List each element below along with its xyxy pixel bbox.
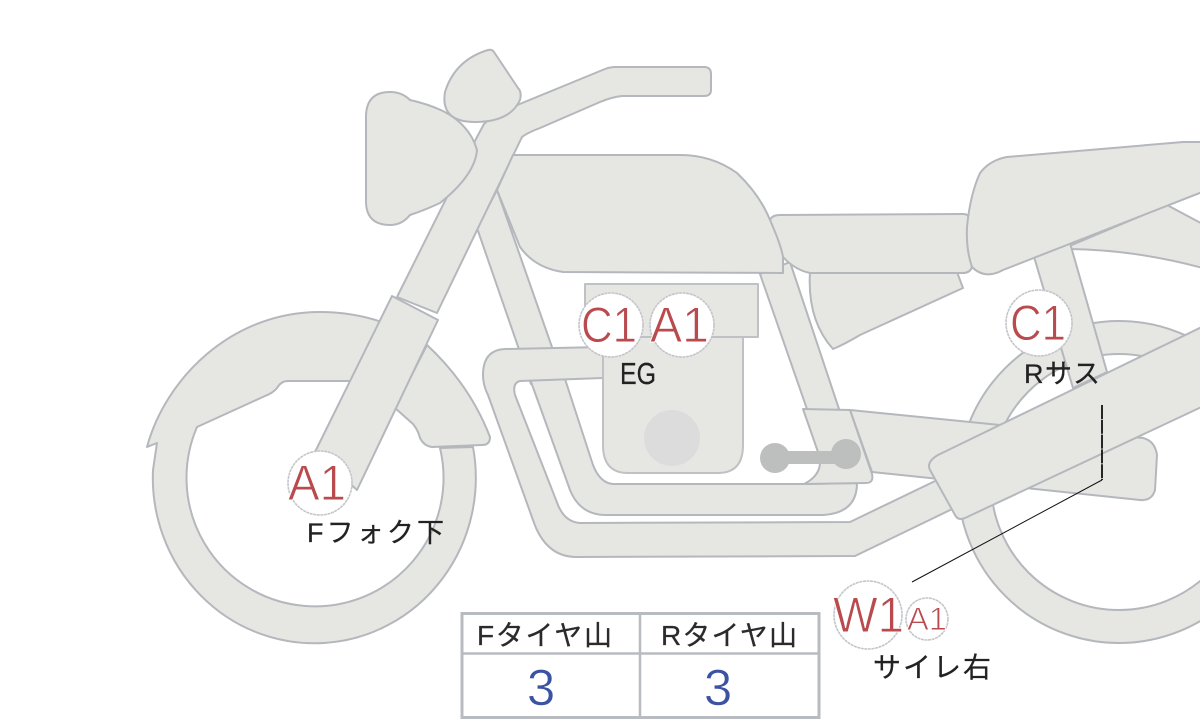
value: front tire tread: 3	[527, 659, 555, 716]
lower frame loop	[530, 379, 857, 515]
muffler	[929, 323, 1200, 519]
label: rear suspension: Rサス	[1024, 359, 1100, 389]
fork and handlebar	[397, 67, 711, 313]
rear shock	[1032, 236, 1107, 388]
marker: rear suspension: C1	[1010, 295, 1066, 351]
marker: muffler W1: W1	[833, 587, 904, 643]
engine crankcase	[603, 337, 743, 473]
marker: front fork	[288, 451, 444, 548]
motorcycle illustration	[147, 50, 1200, 643]
rear wheel	[958, 321, 1200, 643]
label: front fork lower: Fフォク下	[307, 518, 444, 548]
marker: engine A1: A1	[650, 297, 709, 353]
fuel tank	[497, 155, 783, 273]
header: rear tire tread: Rタイヤ山	[661, 620, 797, 651]
marker: muffler A1: A1	[907, 601, 947, 637]
front wheel and left fender	[147, 312, 476, 643]
fork lower tube	[315, 296, 438, 490]
label: engine: EG	[620, 356, 656, 391]
value: rear tire tread: 3	[704, 659, 732, 716]
marker: engine C1: C1	[581, 297, 637, 353]
engine top block	[585, 284, 758, 337]
footrest bar	[760, 439, 861, 473]
frame down tube	[477, 190, 560, 384]
engine cover circle	[644, 410, 700, 466]
swingarm	[850, 410, 1157, 500]
speedometer	[444, 50, 521, 122]
swingarm pivot plate	[803, 409, 872, 484]
header: front tire tread: Fタイヤ山	[477, 620, 612, 651]
leader line: muffler	[912, 405, 1102, 582]
side cover	[810, 272, 963, 349]
rear frame tube	[760, 262, 840, 412]
headlight	[366, 92, 477, 225]
rear seat	[967, 142, 1200, 274]
rear fender	[1060, 205, 1200, 270]
label: muffler right: サイレ右	[873, 652, 991, 683]
marker: rear suspension	[1006, 290, 1100, 389]
marker: front fork: A1	[288, 455, 346, 511]
exhaust pipe	[483, 347, 975, 557]
front fender right	[395, 345, 490, 447]
front seat	[770, 214, 972, 273]
tire tread table	[462, 613, 819, 718]
